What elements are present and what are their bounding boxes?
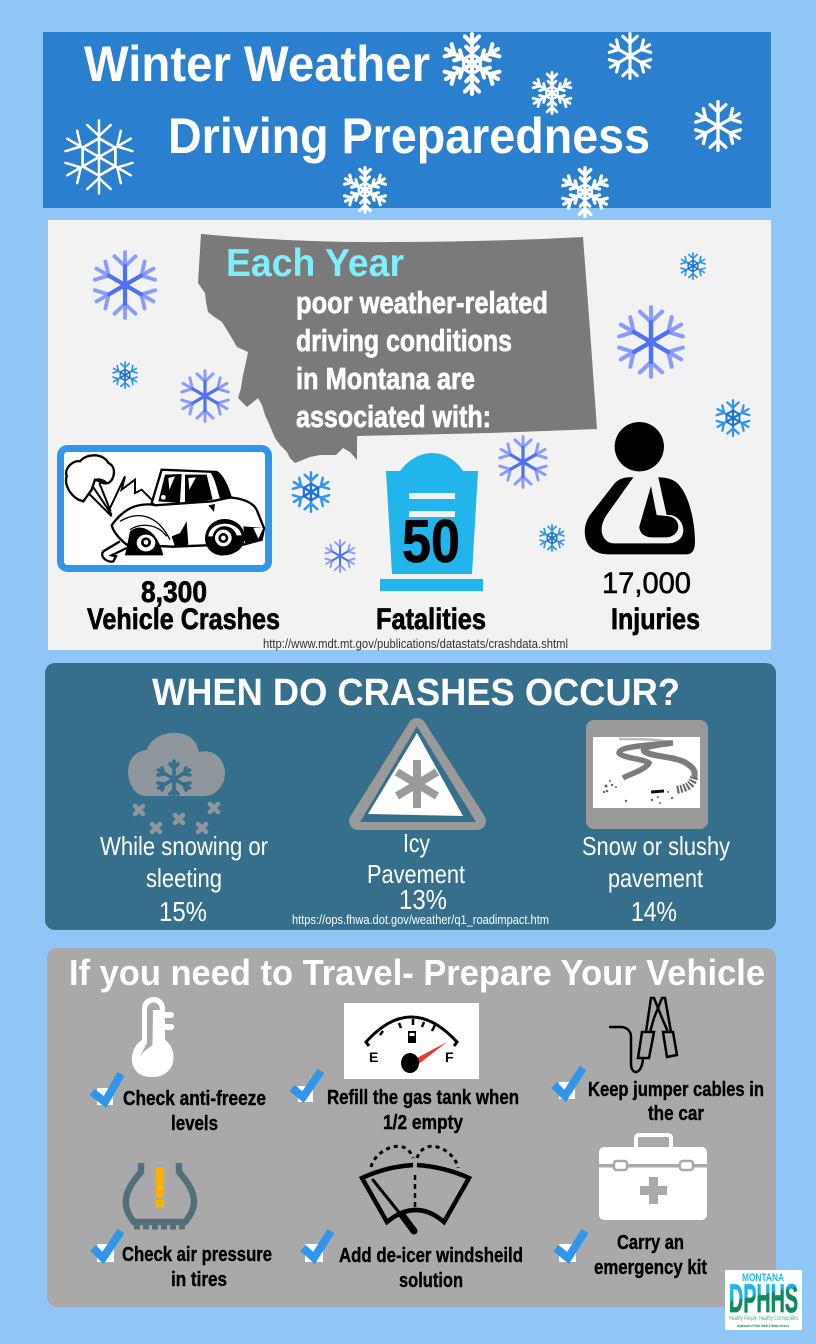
- check: de-icer: solution: [399, 1270, 463, 1292]
- heading: If you need to Travel- Prepare Your Vehicle: [69, 952, 765, 993]
- check: emergency kit: emergency kit: [594, 1257, 707, 1279]
- text: snow or slushy pavement: Snow or slushy: [582, 831, 730, 861]
- check: emergency kit: [556, 1231, 707, 1279]
- stat: injuries: [602, 567, 700, 636]
- check: de-icer: Add de-icer windsheild: [339, 1245, 523, 1267]
- intro text: [296, 285, 548, 434]
- icon: icy road warning sign: [358, 726, 477, 822]
- panel: title banner: [43, 32, 771, 216]
- Montana map shape: [198, 234, 597, 463]
- check: anti-freeze: Check anti-freeze: [123, 1088, 266, 1110]
- source url: https://ops.fhwa.dot.gov/weather/q1_roadimpact.htm: [292, 913, 549, 927]
- icon: fuel gauge: [344, 1003, 479, 1079]
- intro text: poor weather-related: [296, 285, 548, 320]
- icon: tire tracks in snow: [586, 720, 708, 829]
- text: icy pavement: [367, 828, 466, 915]
- icon: thermometer: [132, 997, 174, 1077]
- check: emergency kit: Carry an: [617, 1232, 684, 1254]
- heading: WHEN DO CRASHES OCCUR?: [152, 672, 680, 714]
- icon: jumper cables: [609, 998, 677, 1072]
- icon: fuel gauge: E: [369, 1049, 378, 1065]
- icon: injured person with sling: [585, 422, 695, 554]
- stat: vehicle crashes: [87, 576, 280, 636]
- text: snow or slushy pavement: pavement: [608, 863, 704, 893]
- text: snowing or sleeting: sleeting: [146, 863, 222, 893]
- check: jumper cables: the car: [648, 1103, 704, 1125]
- check: refill gas tank: Refill the gas tank when: [327, 1087, 519, 1109]
- intro text: associated with:: [296, 399, 491, 434]
- icon: windshield wiper: [362, 1146, 469, 1231]
- check: anti-freeze: levels: [171, 1113, 218, 1135]
- heading: Each Year: Each Year: [226, 242, 404, 285]
- stat: injuries: Injuries: [611, 603, 700, 636]
- icon: snow cloud: [128, 733, 225, 832]
- icon: car crash: [60, 448, 268, 568]
- text: snowing or sleeting: [100, 831, 268, 927]
- text: snow or slushy pavement: 14%: [631, 896, 677, 927]
- stat: vehicle crashes: Vehicle Crashes: [87, 603, 280, 636]
- icon: emergency kit: [599, 1135, 707, 1220]
- text: snowing or sleeting: While snowing or: [100, 831, 268, 861]
- check: air pressure: in tires: [171, 1269, 227, 1291]
- stat: injuries: 17,000: [602, 567, 691, 600]
- source url: http://www.mdt.mt.gov/publications/datastats/crashdata.shtml: [263, 637, 568, 651]
- check: air pressure: Check air pressure: [122, 1244, 272, 1266]
- text: icy pavement: Pavement: [367, 859, 466, 889]
- panel: when do crashes occur: [45, 663, 776, 930]
- title line 2: Driving Preparedness: [168, 108, 650, 164]
- icon: tire pressure warning: [126, 1163, 194, 1227]
- text: icy pavement: 13%: [399, 884, 447, 915]
- stat: vehicle crashes: 8,300: [141, 576, 207, 609]
- banner snowflakes: [61, 33, 743, 216]
- check: anti-freeze: [92, 1074, 266, 1135]
- stat: fatalities: Fatalities: [376, 603, 486, 636]
- check: jumper cables: Keep jumper cables in: [588, 1079, 764, 1101]
- text: icy pavement: Icy: [403, 828, 430, 858]
- text: snow or slushy pavement: [582, 831, 730, 927]
- panel: prepare your vehicle: [47, 948, 776, 1307]
- text: snowing or sleeting: 15%: [159, 896, 207, 927]
- check: de-icer: [303, 1231, 523, 1292]
- logo: Montana DPHHS: [725, 1270, 802, 1330]
- logo: Montana DPHHS: MONTANA: [742, 1272, 784, 1284]
- check: refill gas tank: 1/2 empty: [383, 1112, 464, 1134]
- check: air pressure: [93, 1231, 272, 1291]
- check: jumper cables: [554, 1068, 764, 1125]
- title line 1: Winter Weather: [84, 36, 430, 92]
- check: refill gas tank: [292, 1071, 519, 1134]
- logo: Montana DPHHS: Department of Public Health & Human Services: [737, 1324, 789, 1328]
- decorative snowflakes: [91, 252, 751, 572]
- panel: each year statistics: [48, 220, 771, 651]
- icon: fuel gauge: F: [445, 1049, 454, 1065]
- icon: headstone with 50: [380, 453, 483, 591]
- intro text: in Montana are: [296, 361, 475, 396]
- icon: headstone with 50: 50: [402, 508, 460, 575]
- intro text: driving conditions: [296, 323, 512, 358]
